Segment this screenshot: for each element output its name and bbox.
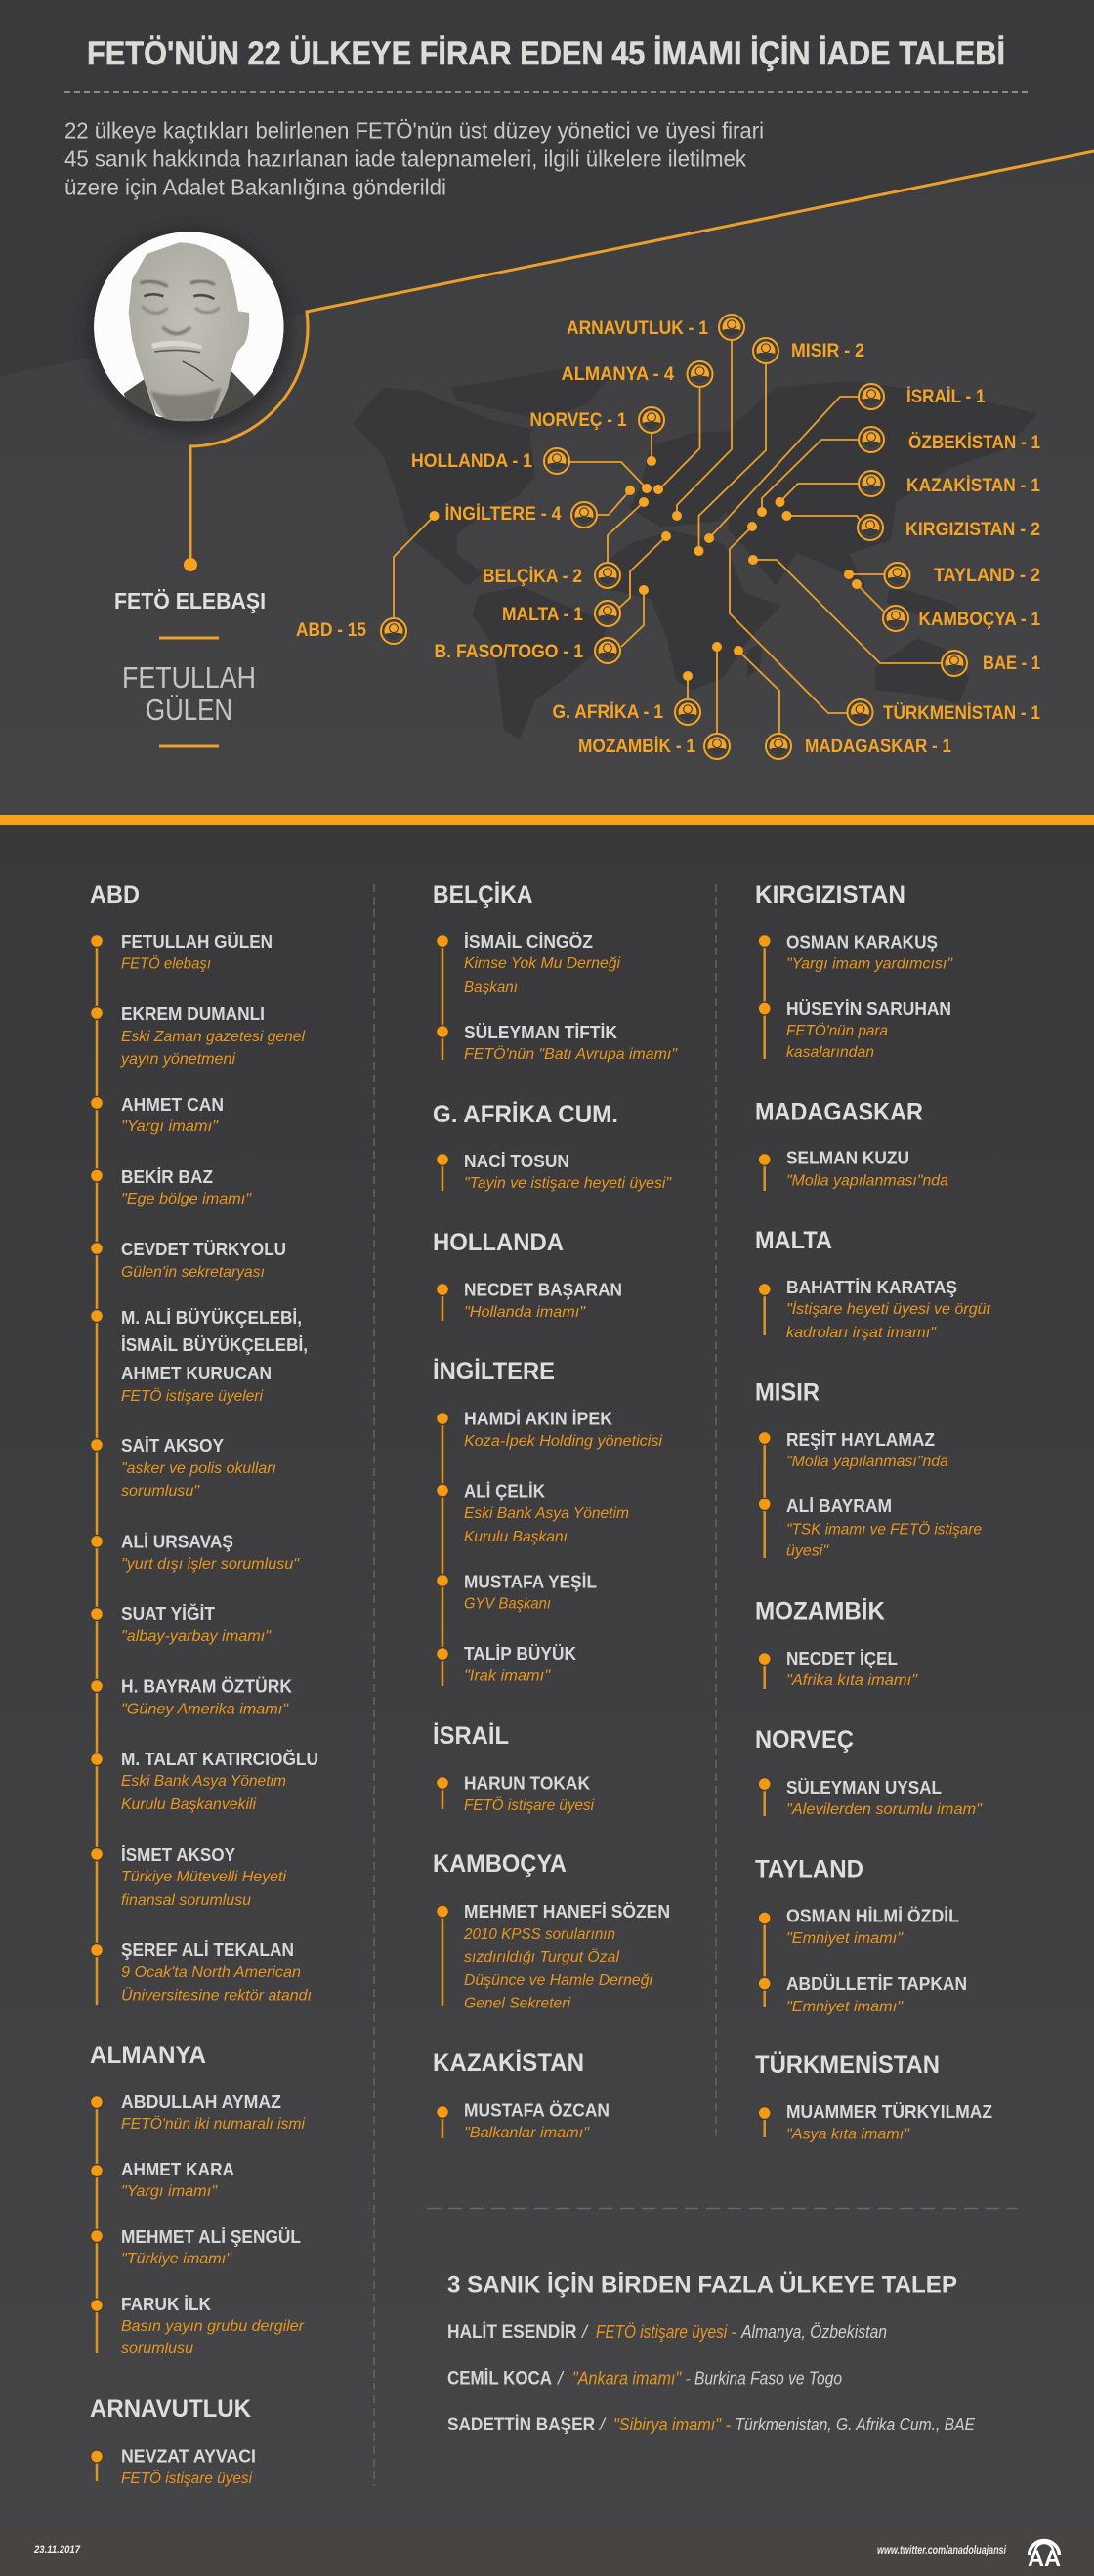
section: MOZAMBİK <box>755 1598 918 1689</box>
section: ABD: SUAT YİĞİT <box>121 1603 215 1624</box>
section: KAZAKİSTAN: MUSTAFA ÖZCAN <box>464 2100 610 2120</box>
section: ABD: "Güney Amerika imamı" <box>121 1702 289 1717</box>
row: Sadettin Başer: "Sibirya imamı" - <box>613 2415 731 2434</box>
section: MALTA: MALTA <box>755 1227 832 1254</box>
map location dots <box>430 456 862 681</box>
section: HOLLANDA: "Hollanda imamı" <box>464 1304 586 1321</box>
section: TAYLAND <box>755 1856 967 2015</box>
map country labels <box>296 318 1040 757</box>
section: BELÇİKA <box>433 881 678 1063</box>
section: KIRGIZISTAN: HÜSEYİN SARUHAN <box>786 999 951 1019</box>
section: TAYLAND: "Emniyet imamı" <box>786 1999 904 2015</box>
section: ABD: finansal sorumlusu <box>121 1892 251 1909</box>
intro text block: 45 sanık hakkında hazırlanan iade talepnameleri, ilgili ülkelere iletilmek <box>64 147 746 172</box>
section: KAZAKİSTAN <box>433 2049 610 2141</box>
section: MISIR: ALİ BAYRAM <box>786 1497 892 1516</box>
map country labels: B. FASO/TOGO - 1 <box>434 642 583 662</box>
section: MADAGASKAR <box>755 1098 948 1191</box>
section: MISIR: "TSK imamı ve FETÖ istişare <box>786 1520 982 1538</box>
heading: FETÖ elebaşı: FETULLAH <box>122 660 256 695</box>
section: ARNAVUTLUK: NEVZAT AYVACI <box>121 2446 256 2466</box>
section: ALMANYA: AHMET KARA <box>121 2160 234 2179</box>
map country labels: NORVEÇ - 1 <box>529 410 627 431</box>
section: NORVEÇ: "Alevilerden sorumlu imam" <box>786 1801 983 1818</box>
section: KAMBOÇYA: 2010 KPSS sorularının <box>463 1926 615 1943</box>
row: Sadettin Başer: / <box>598 2415 607 2434</box>
section: ABD: M. ALİ BÜYÜKÇELEBİ, <box>121 1308 302 1328</box>
panel: multiple-country requests <box>447 2272 976 2435</box>
section: G. AFRİKA CUM.: "Tayin ve istişare heyeti üyesi" <box>464 1175 672 1192</box>
section: ALMANYA <box>90 2042 305 2357</box>
row: Cemil Koca: "Ankara imamı" - <box>572 2368 691 2387</box>
heading: FETÖ elebaşı: FETÖ ELEBAŞI <box>114 588 266 613</box>
section: KIRGIZISTAN: "Yargı imam yardımcısı" <box>786 955 953 973</box>
map country labels: TÜRKMENİSTAN - 1 <box>883 703 1040 724</box>
panel: column 1 <box>90 881 318 2487</box>
section: KAMBOÇYA <box>433 1850 670 2012</box>
row: Halit Esendir: / <box>580 2322 589 2342</box>
section: ABD: Gülen'in sekretaryası <box>121 1264 265 1281</box>
section: MADAGASKAR: SELMAN KUZU <box>786 1149 909 1168</box>
heading: 3 sanık: 3 SANIK İÇİN BİRDEN FAZLA ÜLKEYE TALEP <box>447 2272 957 2298</box>
section: ABD: "albay-yarbay imamı" <box>121 1628 272 1645</box>
footer url: www.twitter.com/anadoluajansi <box>877 2543 1006 2556</box>
map country labels: MISIR - 2 <box>791 341 864 361</box>
section: ALMANYA: ABDULLAH AYMAZ <box>121 2092 281 2112</box>
section: İNGİLTERE: TALİP BÜYÜK <box>464 1644 576 1664</box>
section: KIRGIZISTAN: KIRGIZISTAN <box>755 881 905 908</box>
section: HOLLANDA: NECDET BAŞARAN <box>464 1280 622 1299</box>
section: ABD: "Ege bölge imamı" <box>121 1191 252 1207</box>
map country labels: ARNAVUTLUK - 1 <box>567 318 708 339</box>
section: İNGİLTERE: "Irak imamı" <box>464 1668 551 1684</box>
section: İNGİLTERE: Kurulu Başkanı <box>464 1529 568 1545</box>
panel: column 2 <box>433 881 678 2141</box>
map country labels: MOZAMBİK - 1 <box>578 737 695 757</box>
section: KAMBOÇYA: Düşünce ve Hamle Derneği <box>464 1972 652 1989</box>
section: ABD: Eski Bank Asya Yönetim <box>121 1773 286 1790</box>
row: Cemil Koca: CEMİL KOCA <box>447 2368 552 2389</box>
section: İNGİLTERE: Eski Bank Asya Yönetim <box>464 1505 629 1522</box>
section: ABD: ALİ URSAVAŞ <box>121 1532 233 1551</box>
section: ABD: FETULLAH GÜLEN <box>121 932 273 951</box>
section: ABD: BEKİR BAZ <box>121 1167 213 1187</box>
map person icons <box>381 315 967 759</box>
section: ABD: İSMAİL BÜYÜKÇELEBİ, <box>121 1335 308 1355</box>
row: Halit Esendir <box>447 2322 887 2343</box>
section: MISIR: REŞİT HAYLAMAZ <box>786 1430 935 1450</box>
section: ALMANYA: sorumlusu <box>121 2341 193 2357</box>
section: TAYLAND: "Emniyet imamı" <box>786 1930 904 1947</box>
section: ABD: SAİT AKSOY <box>121 1436 224 1456</box>
section: KAMBOÇYA: sızdırıldığı Turgut Özal <box>464 1948 619 1965</box>
map country labels: ALMANYA - 4 <box>561 364 674 385</box>
section: İNGİLTERE: GYV Başkanı <box>464 1596 551 1612</box>
section: ALMANYA: "Türkiye imamı" <box>121 2251 232 2267</box>
map country labels: İNGİLTERE - 4 <box>445 504 562 525</box>
map country labels: BELÇİKA - 2 <box>483 567 582 587</box>
section: ARNAVUTLUK <box>90 2395 256 2487</box>
section: İNGİLTERE: İNGİLTERE <box>433 1358 555 1385</box>
section: TÜRKMENİSTAN: "Asya kıta imamı" <box>786 2126 910 2143</box>
row: Cemil Koca: Burkina Faso ve Togo <box>694 2368 842 2387</box>
row: Cemil Koca <box>447 2368 842 2389</box>
section: MOZAMBİK: NECDET İÇEL <box>786 1649 898 1668</box>
section: NORVEÇ: NORVEÇ <box>755 1726 854 1753</box>
section: ALMANYA: FARUK İLK <box>121 2295 211 2314</box>
section: ABD: CEVDET TÜRKYOLU <box>121 1240 286 1259</box>
world map <box>352 368 1037 739</box>
section: MADAGASKAR: MADAGASKAR <box>755 1098 923 1125</box>
map country labels: İSRAİL - 1 <box>906 387 986 407</box>
section: MALTA: "İstişare heyeti üyesi ve örgüt <box>786 1299 991 1318</box>
section: ARNAVUTLUK: ARNAVUTLUK <box>90 2395 251 2423</box>
section: ABD: "yurt dışı işler sorumlusu" <box>121 1556 300 1573</box>
panel: column 3 <box>755 881 992 2143</box>
section: ABD: ABD <box>90 881 140 908</box>
section: ABD: FETÖ istişare üyeleri <box>121 1387 263 1405</box>
connector end dot <box>184 558 197 571</box>
section: HOLLANDA <box>433 1229 622 1321</box>
section: ABD: İSMET AKSOY <box>121 1845 235 1865</box>
section: NORVEÇ <box>755 1726 983 1818</box>
section: TAYLAND: OSMAN HİLMİ ÖZDİL <box>786 1907 959 1926</box>
section: ALMANYA: ALMANYA <box>90 2042 206 2069</box>
map country labels: KAMBOÇYA - 1 <box>918 610 1040 630</box>
section: KAZAKİSTAN: KAZAKİSTAN <box>433 2049 584 2077</box>
row: Halit Esendir: HALİT ESENDİR <box>447 2322 577 2343</box>
section: MALTA <box>755 1227 991 1341</box>
section: İSRAİL: İSRAİL <box>433 1722 509 1750</box>
row: Sadettin Başer: SADETTİN BAŞER <box>447 2415 595 2435</box>
section: ABD: yayın yönetmeni <box>120 1051 235 1068</box>
section: ALMANYA: FETÖ'nün iki numaralı ismi <box>121 2115 305 2133</box>
intro text block: üzere için Adalet Bakanlığına gönderildi <box>64 174 446 199</box>
section: ABD: AHMET CAN <box>121 1095 224 1115</box>
title: FETÖ'NÜN 22 ÜLKEYE FİRAR EDEN 45 İMAMI İÇİN İADE TALEBİ <box>87 35 1005 72</box>
section: ALMANYA: Basın yayın grubu dergiler <box>121 2318 305 2335</box>
section: ABD: 9 Ocak'ta North American <box>121 1964 301 1981</box>
section: ALMANYA: MEHMET ALİ ŞENGÜL <box>121 2227 301 2247</box>
section: ABD: H. BAYRAM ÖZTÜRK <box>121 1676 292 1696</box>
map country labels: KAZAKİSTAN - 1 <box>906 476 1040 496</box>
row: Cemil Koca: / <box>556 2368 565 2387</box>
section: ABD: "Yargı imamı" <box>121 1119 219 1135</box>
section: G. AFRİKA CUM.: NACİ TOSUN <box>464 1152 569 1171</box>
section: TAYLAND: TAYLAND <box>755 1856 863 1883</box>
section: G. AFRİKA CUM. <box>433 1101 672 1192</box>
section: G. AFRİKA CUM.: G. AFRİKA CUM. <box>433 1101 618 1128</box>
map country labels: KIRGIZISTAN - 2 <box>905 520 1040 540</box>
connector line from portrait <box>190 151 1094 565</box>
section: BELÇİKA: BELÇİKA <box>433 881 533 908</box>
section: İSRAİL: HARUN TOKAK <box>464 1774 590 1794</box>
section: TAYLAND: ABDÜLLETİF TAPKAN <box>786 1974 967 1994</box>
section: MOZAMBİK: MOZAMBİK <box>755 1598 885 1626</box>
section: ABD: EKREM DUMANLI <box>121 1004 265 1024</box>
section: ABD: FETÖ elebaşı <box>121 955 211 973</box>
section: MALTA: kadroları irşat imamı" <box>786 1325 937 1341</box>
section: MISIR <box>755 1379 982 1559</box>
map country labels: G. AFRİKA - 1 <box>553 702 663 723</box>
section: ABD <box>90 881 318 2005</box>
section: ABD: AHMET KURUCAN <box>121 1364 272 1383</box>
heading: FETÖ elebaşı: GÜLEN <box>146 693 232 727</box>
section: ABD: "asker ve polis okulları <box>121 1460 276 1477</box>
section: MISIR: "Molla yapılanması"nda <box>786 1454 948 1470</box>
map country labels: MADAGASKAR - 1 <box>805 737 951 757</box>
intro text block: 22 ülkeye kaçtıkları belirlenen FETÖ'nün üst düzey yönetici ve üyesi firari <box>64 117 764 143</box>
map country labels: HOLLANDA - 1 <box>411 451 532 472</box>
footer band <box>0 2529 1094 2576</box>
section: ABD: Üniversitesine rektör atandı <box>121 1987 312 2005</box>
section: HOLLANDA: HOLLANDA <box>433 1229 564 1256</box>
section: MADAGASKAR: "Molla yapılanması"nda <box>786 1172 948 1190</box>
intro text block <box>64 117 764 199</box>
section: BELÇİKA: SÜLEYMAN TİFTİK <box>464 1023 617 1042</box>
section: ABD: Kurulu Başkanvekili <box>121 1796 256 1813</box>
heading: FETÖ elebaşı <box>114 588 266 748</box>
photo shadow <box>85 227 292 434</box>
section: İNGİLTERE: MUSTAFA YEŞİL <box>464 1573 597 1592</box>
section: ABD: Eski Zaman gazetesi genel <box>121 1029 305 1045</box>
map country labels: ÖZBEKİSTAN - 1 <box>908 433 1040 453</box>
row: Sadettin Başer: Türkmenistan, G. Afrika Cum., BAE <box>735 2415 976 2434</box>
section: NORVEÇ: SÜLEYMAN UYSAL <box>786 1778 942 1797</box>
section: TÜRKMENİSTAN: MUAMMER TÜRKYILMAZ <box>786 2102 992 2122</box>
section: KIRGIZISTAN: kasalarından <box>786 1044 874 1061</box>
section: KAMBOÇYA: Genel Sekreteri <box>464 1995 570 2012</box>
section: MISIR: MISIR <box>755 1379 820 1407</box>
section: ABD: sorumlusu" <box>121 1483 200 1499</box>
footer date: 23.11.2017 <box>33 2544 81 2555</box>
section: İNGİLTERE: HAMDİ AKIN İPEK <box>464 1409 612 1428</box>
section: ARNAVUTLUK: FETÖ istişare üyesi <box>121 2470 252 2487</box>
section: İNGİLTERE: ALİ ÇELİK <box>464 1481 545 1500</box>
panel: lower background <box>0 825 1094 2529</box>
map country labels: BAE - 1 <box>983 654 1040 674</box>
section: BELÇİKA: İSMAİL CİNGÖZ <box>464 932 593 951</box>
section: TÜRKMENİSTAN: TÜRKMENİSTAN <box>755 2050 940 2079</box>
row: Sadettin Başer <box>447 2415 976 2435</box>
section: BELÇİKA: Kimse Yok Mu Derneği <box>464 955 620 972</box>
section: MALTA: BAHATTİN KARATAŞ <box>786 1278 957 1297</box>
section: İNGİLTERE <box>433 1358 662 1686</box>
section: KIRGIZISTAN: FETÖ'nün para <box>786 1022 888 1039</box>
section: MOZAMBİK: "Afrika kıta imamı" <box>786 1672 918 1689</box>
section: TÜRKMENİSTAN <box>755 2050 992 2143</box>
section: İSRAİL <box>433 1722 594 1814</box>
map country labels: TAYLAND - 2 <box>934 566 1040 586</box>
section: ALMANYA: "Yargı imamı" <box>121 2183 218 2200</box>
section: İNGİLTERE: Koza-İpek Holding yöneticisi <box>464 1431 662 1450</box>
section: KAMBOÇYA: KAMBOÇYA <box>433 1850 567 1878</box>
section: MISIR: üyesi" <box>786 1543 829 1559</box>
photo: Fetullah Gülen portrait <box>94 232 284 430</box>
map country labels: MALTA - 1 <box>502 605 583 625</box>
row: Halit Esendir: Almanya, Özbekistan <box>740 2322 887 2342</box>
gold divider bar <box>0 815 1094 825</box>
section: ABD: ŞEREF ALİ TEKALAN <box>121 1940 294 1960</box>
section: ABD: M. TALAT KATIRCIOĞLU <box>121 1749 318 1769</box>
icon: Anadolu Ajansı logo: AA <box>1028 2546 1061 2572</box>
section: KAZAKİSTAN: "Balkanlar imamı" <box>464 2125 590 2141</box>
map country labels: ABD - 15 <box>296 620 366 641</box>
section: KIRGIZISTAN: OSMAN KARAKUŞ <box>786 932 938 951</box>
section: BELÇİKA: FETÖ'nün "Batı Avrupa imamı" <box>464 1045 678 1063</box>
section: KIRGIZISTAN <box>755 881 953 1061</box>
section: İSRAİL: FETÖ istişare üyesi <box>464 1796 594 1814</box>
map connectors <box>394 340 942 734</box>
panel: background top <box>0 0 1094 815</box>
section: KAMBOÇYA: MEHMET HANEFİ SÖZEN <box>464 1902 670 1921</box>
section: BELÇİKA: Başkanı <box>464 979 518 995</box>
row: Halit Esendir: FETÖ istişare üyesi - <box>596 2322 736 2342</box>
section: ABD: Türkiye Mütevelli Heyeti <box>121 1869 286 1885</box>
